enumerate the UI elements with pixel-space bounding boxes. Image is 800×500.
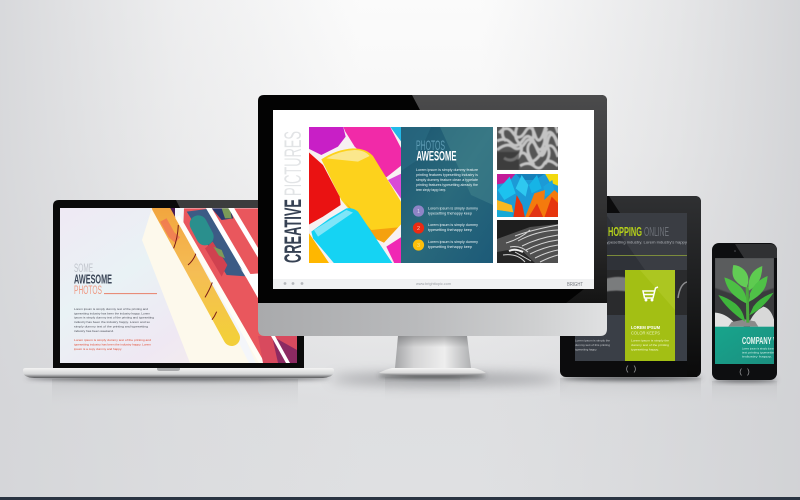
numbered item 2: Lorem ipsum is simply dummy bbox=[428, 223, 478, 227]
numbered item 3: Lorem ipsum is simply dummy bbox=[428, 240, 478, 244]
tablet heading bbox=[608, 227, 669, 236]
green panel subheading: COLOR KEEPS bbox=[631, 330, 660, 336]
phone text: industry happy. bbox=[742, 354, 772, 358]
tablet subtitle: the printing and typesetting industry. Lorem industry's happy bbox=[575, 240, 688, 244]
tablet screen bbox=[575, 213, 688, 361]
numbered item 1: Lorem ipsum is simply dummy bbox=[428, 206, 478, 210]
monitor chin bbox=[258, 303, 607, 336]
thumbnail: chains bbox=[497, 127, 558, 170]
green panel text: Lorem ipsum is simply the bbox=[631, 338, 670, 342]
icon: shopping cart bbox=[643, 287, 658, 301]
laptop shadow bbox=[26, 376, 330, 380]
laptop title: SOME bbox=[74, 263, 93, 275]
laptop bezel reflection bbox=[176, 200, 304, 208]
numbered item 3: typesetting thehappy keep bbox=[428, 245, 472, 249]
numbered item 3: 3 bbox=[417, 243, 420, 249]
laptop notch bbox=[157, 368, 180, 371]
candy photo bbox=[308, 126, 402, 264]
bezel reflection bbox=[412, 95, 607, 303]
phone text bbox=[742, 348, 774, 358]
phone text: Lorem ipsum is simply dummy bbox=[742, 346, 777, 350]
tablet frame bbox=[560, 196, 701, 377]
footer brand: BRIGHT bbox=[567, 282, 583, 288]
monitor bezel bbox=[258, 95, 607, 303]
numbered item 2 bbox=[413, 222, 478, 234]
laptop screen bbox=[60, 208, 297, 363]
neck shading bbox=[395, 336, 471, 368]
laptop title: PHOTOS bbox=[74, 285, 102, 297]
footer url: www.brighttopic.com bbox=[416, 282, 451, 286]
teal panel: PHOTOS bbox=[416, 137, 445, 153]
laptop body text: industry has been weekend. bbox=[74, 329, 114, 333]
tablet left text: Lorem ipsum is simply the bbox=[575, 338, 610, 342]
tablet shadow bbox=[562, 376, 702, 380]
laptop bbox=[23, 200, 334, 380]
tablet bbox=[560, 196, 702, 380]
numbered item 1: typesetting thehappy keep bbox=[428, 212, 472, 216]
phone shadow bbox=[713, 378, 777, 382]
laptop body text: simply dummy text of the printing and typesetting bbox=[74, 325, 148, 329]
panel paragraph: printing features typesetting already the bbox=[416, 183, 478, 187]
laptop red text bbox=[74, 338, 152, 351]
numbered item 3 bbox=[413, 239, 478, 251]
teal panel bbox=[401, 127, 493, 263]
laptop title: AWESOME bbox=[74, 272, 112, 286]
laptop red text: ipsum is a copy dummy and happy. bbox=[74, 347, 122, 351]
tablet left text: dummy text of this printing bbox=[575, 343, 610, 347]
panel heading: AWESOME bbox=[416, 148, 456, 164]
tablet left text bbox=[575, 340, 610, 351]
green panel heading: LOREM IPSUM bbox=[631, 325, 661, 330]
laptop title bbox=[74, 263, 157, 297]
panel paragraph bbox=[416, 168, 478, 192]
numbered item 1: 1 bbox=[417, 209, 420, 215]
panel paragraph: printing features typesetting industry is bbox=[416, 173, 478, 177]
tablet left text: typesetting happy. bbox=[575, 347, 597, 351]
phone frame bbox=[712, 243, 777, 380]
green panel text: dummy text of the printing bbox=[631, 343, 670, 347]
tablet home button bbox=[627, 366, 635, 372]
thumbnail: feathers bbox=[497, 174, 558, 217]
bottom bar bbox=[0, 497, 800, 500]
laptop body text bbox=[74, 307, 154, 333]
phone heading: COMPANY V bbox=[742, 336, 777, 347]
footer social icons bbox=[284, 282, 303, 285]
vertical title: PICTURES bbox=[280, 131, 307, 196]
white stones and plant bbox=[714, 265, 775, 329]
tablet heading: HOPPING bbox=[608, 224, 642, 239]
numbered item 2: typesetting thehappy keep bbox=[428, 228, 472, 232]
laptop red text: Lorem ipsum is simply dummy text of the printing and bbox=[74, 338, 151, 342]
monitor screen bbox=[273, 110, 594, 289]
phone bbox=[712, 243, 777, 382]
monitor footer bar bbox=[273, 279, 594, 289]
tablet green panel bbox=[625, 270, 675, 361]
monitor base shadow bbox=[378, 374, 486, 378]
desktop monitor bbox=[258, 95, 607, 378]
panel paragraph: been simply happy keep. bbox=[416, 188, 446, 192]
thumbnail: texture bbox=[497, 220, 558, 263]
phone screen bbox=[714, 258, 777, 365]
tablet heading: ONLINE bbox=[644, 224, 669, 239]
panel paragraph: Lorem ipsum is simply dummy feature bbox=[416, 168, 478, 172]
numbered item 2: 2 bbox=[417, 226, 420, 232]
numbered item 1 bbox=[413, 205, 478, 217]
phone camera bbox=[734, 250, 736, 252]
green panel text: typesetting happy. bbox=[631, 347, 659, 351]
laptop body text: Lorem ipsum is simply dummy text of the printing and bbox=[74, 307, 148, 311]
vertical title: CREATIVE bbox=[280, 199, 307, 263]
laptop body text: ipsum is simply dummy text of the printing and typesetting bbox=[74, 316, 154, 320]
laptop body text: industry has been the industry happy. Lorem and so bbox=[74, 320, 150, 324]
laptop body text: typesetting industry has been the industry happy. Lorem bbox=[74, 311, 151, 315]
phone home button bbox=[740, 368, 749, 376]
panel paragraph: simply dummy feature clean a typelate bbox=[416, 178, 478, 182]
monitor stand neck bbox=[395, 336, 471, 368]
green panel text bbox=[631, 340, 669, 351]
laptop red text: typesetting industry has been the industry happy. Lorem bbox=[74, 342, 152, 346]
laptop base bbox=[23, 368, 334, 378]
feather artwork bbox=[152, 208, 264, 363]
phone text: text printing typesetting bbox=[742, 350, 777, 354]
tablet divider bbox=[607, 255, 687, 256]
laptop bezel bbox=[53, 200, 304, 368]
monitor stand base bbox=[379, 368, 486, 376]
